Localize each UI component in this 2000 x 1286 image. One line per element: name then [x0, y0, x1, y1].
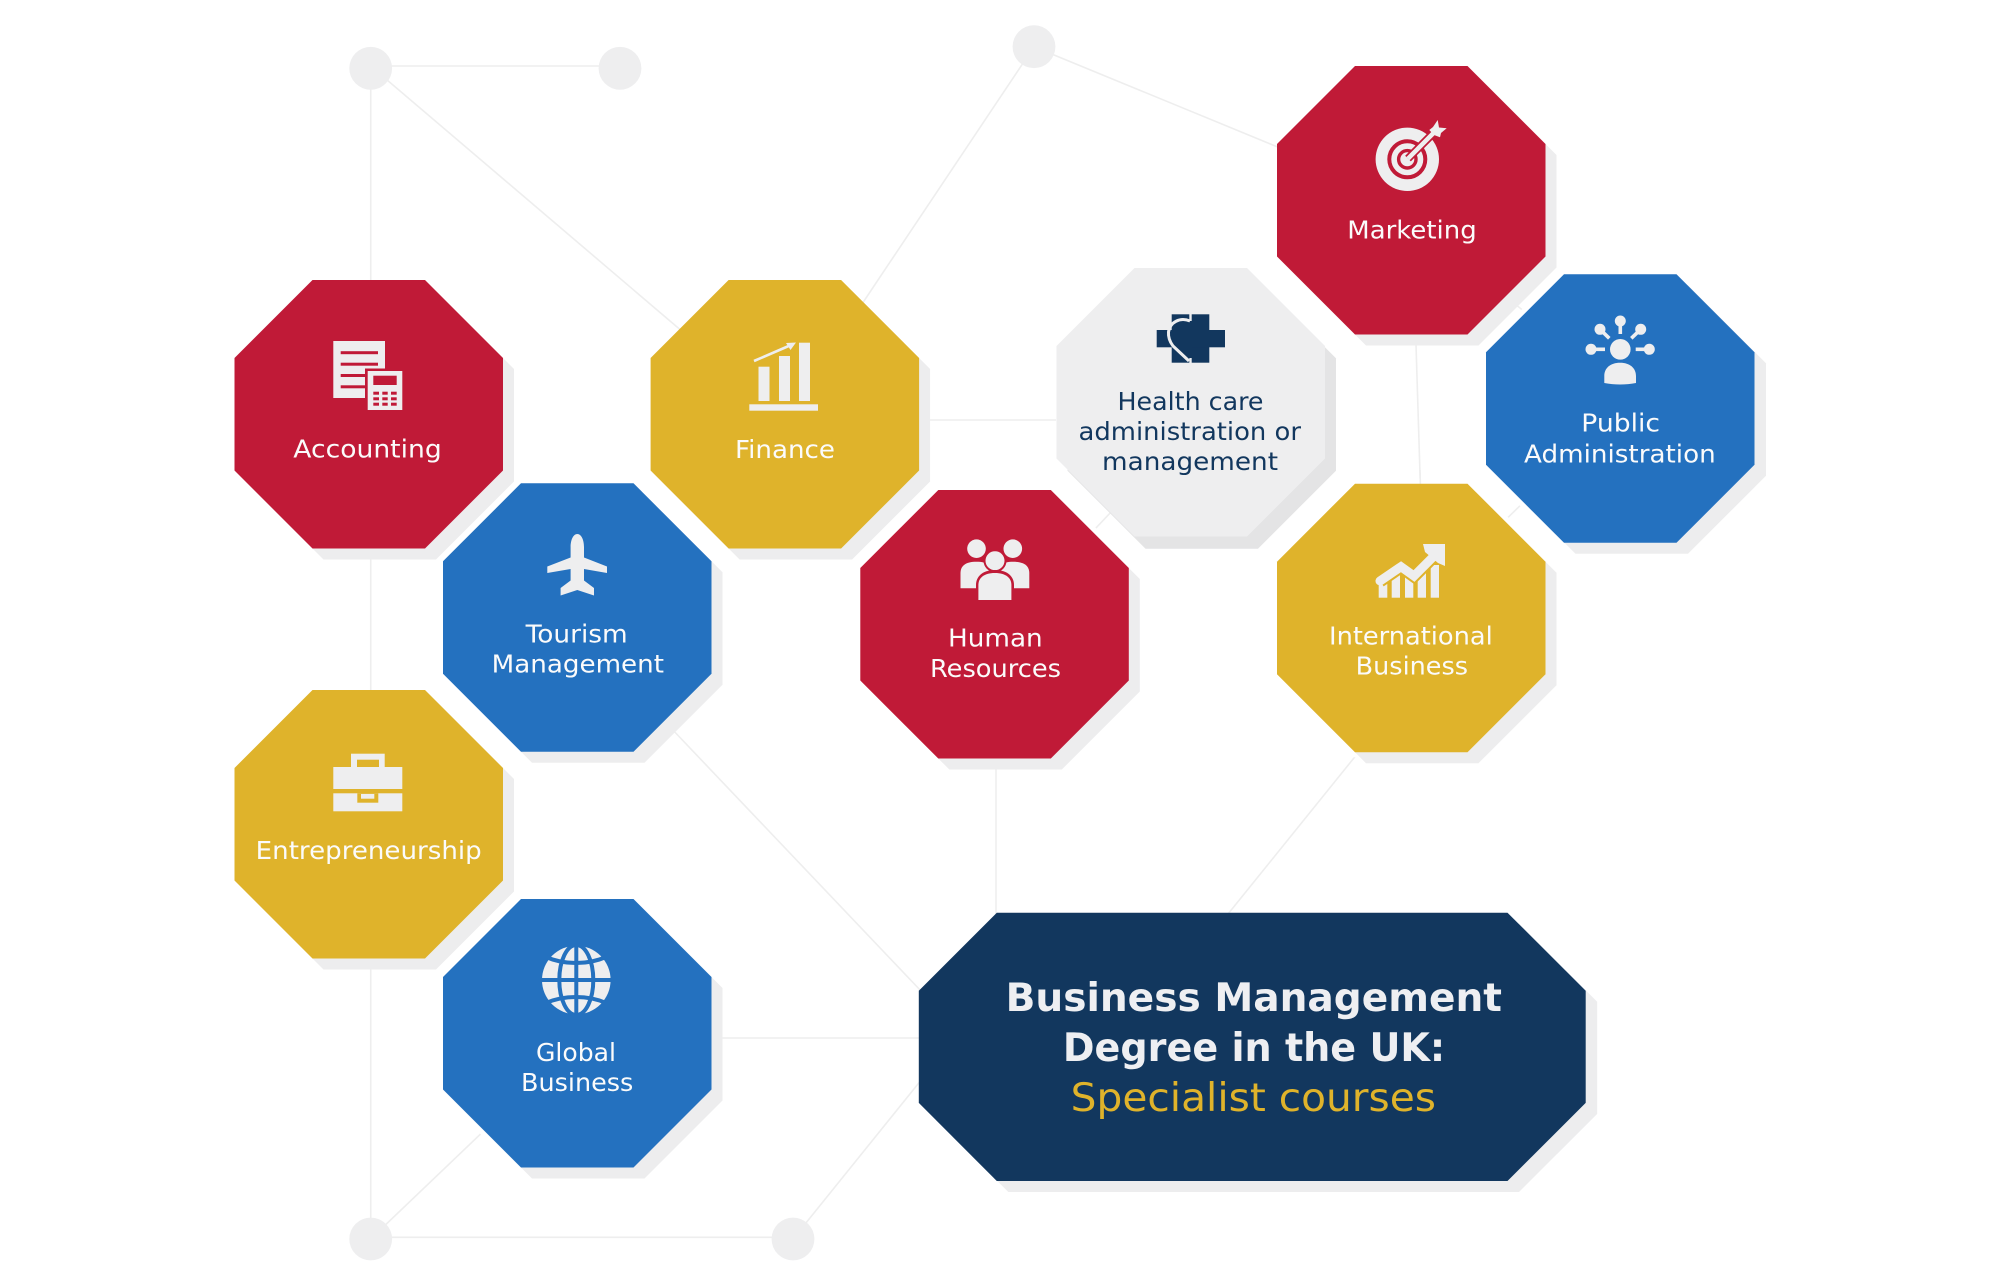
- label: Tourism Management: Tourism: [525, 620, 628, 649]
- label: Public Administration: Public: [1581, 409, 1660, 438]
- panel: Global Business: [443, 899, 722, 1178]
- panel: Marketing: [1277, 66, 1556, 346]
- icon: person with connected nodes: [1586, 316, 1655, 384]
- icon: group of people: [960, 539, 1029, 602]
- label: International Business: [1329, 622, 1493, 681]
- label: Marketing: Marketing: [1347, 216, 1477, 245]
- label: Health care administration or management: management: [1102, 447, 1278, 476]
- label: Health care administration or management: administration or: [1078, 417, 1302, 446]
- panel: Accounting: [234, 280, 514, 560]
- label: Public Administration: [1524, 409, 1716, 468]
- icon: medical cross with heart: [1157, 314, 1225, 363]
- title text: Specialist courses: [1071, 1076, 1436, 1121]
- label: Human Resources: [930, 624, 1061, 683]
- label: Accounting: Accounting: [293, 434, 442, 463]
- label: Global Business: [521, 1038, 633, 1097]
- label: Health care administration or management: [1078, 387, 1302, 476]
- label: International Business: International: [1329, 622, 1493, 651]
- label: Finance: Finance: [735, 435, 835, 464]
- icon: globe: [541, 945, 611, 1015]
- icon: briefcase: [333, 754, 402, 811]
- title text: [1006, 976, 1502, 1121]
- network connector lines: [371, 47, 1530, 1239]
- panel: Human Resources: [860, 490, 1140, 770]
- panel: Health care administration or management: [1056, 268, 1336, 549]
- panel: Public Administration: [1486, 274, 1766, 554]
- panel: title: [919, 913, 1597, 1192]
- label: Global Business: Global: [536, 1038, 616, 1067]
- panel: Tourism Management: [443, 483, 722, 763]
- label: Public Administration: Administration: [1524, 439, 1716, 468]
- panel: Entrepreneurship: [234, 690, 514, 970]
- label: Human Resources: Human: [948, 624, 1043, 653]
- panel: International Business: [1277, 470, 1556, 763]
- icon: document and calculator: [333, 341, 405, 412]
- icon: airplane: [547, 534, 607, 596]
- icon: growth chart with arrow: [1379, 544, 1445, 598]
- label: Health care administration or management: Health care: [1118, 387, 1264, 416]
- label: Entrepreneurship: Entrepreneurship: [256, 836, 482, 865]
- network node circles: [349, 25, 1055, 1260]
- title text: Business Management: [1006, 976, 1502, 1021]
- title text: Degree in the UK:: [1063, 1026, 1445, 1071]
- label: International Business: Business: [1356, 652, 1468, 681]
- label: Tourism Management: Management: [492, 650, 664, 679]
- label: Human Resources: Resources: [930, 654, 1061, 683]
- label: Global Business: Business: [521, 1068, 633, 1097]
- icon: target with dart: [1376, 120, 1447, 191]
- label: Tourism Management: [492, 620, 664, 679]
- panel: Finance: [651, 280, 930, 560]
- icon: rising bar chart: [749, 342, 818, 411]
